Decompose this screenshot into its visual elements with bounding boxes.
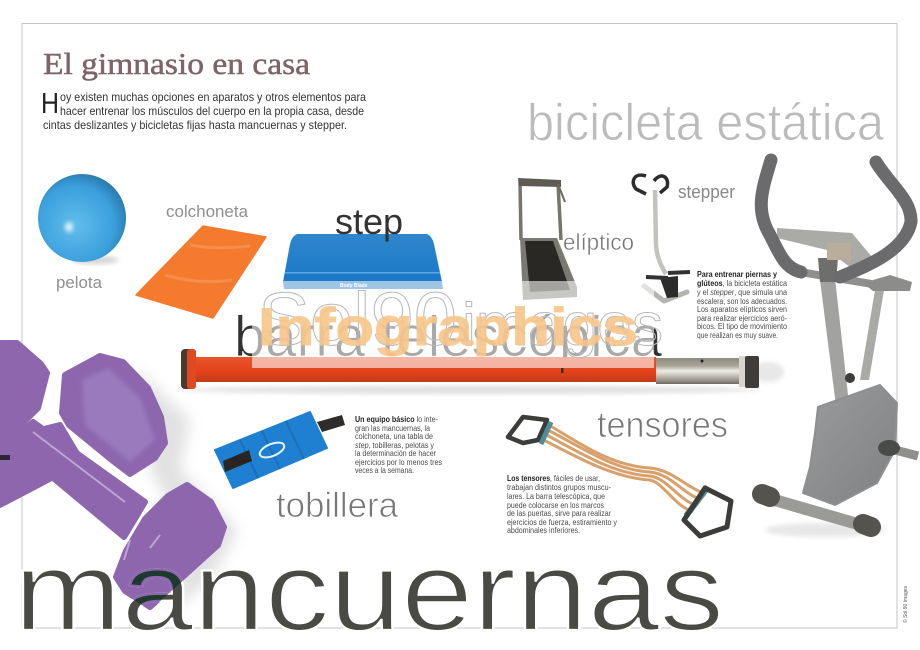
watermark: images: images — [462, 291, 663, 358]
dumbbell shadow — [135, 368, 238, 612]
bike console — [777, 228, 872, 267]
brand on step: Body Blade — [340, 283, 368, 289]
text block: piernas y glúteos: glúteos, la bicicleta estática — [697, 279, 787, 288]
intro lines — [43, 90, 366, 132]
icon: stepper — [633, 175, 690, 301]
icon: resistance bands — [508, 417, 731, 536]
label: tobillera: tobillera — [276, 486, 399, 525]
bike foot tube — [764, 497, 868, 527]
text block: piernas y glúteos: y el stepper, que simula una — [697, 288, 787, 297]
icon: ball — [38, 174, 126, 264]
text block: equipo básico: veces a la semana. — [355, 466, 414, 475]
bike rear axle — [880, 446, 918, 456]
text block: tensores: lares. La barra telescópica, que — [507, 492, 605, 501]
text block: piernas y glúteos: para realizar ejercicios aeró- — [697, 314, 787, 323]
text block: piernas y glúteos: Los aparatos elípticos sirven — [697, 305, 787, 314]
drop cap: H — [41, 88, 59, 120]
text block: tensores — [507, 474, 617, 535]
rear dumbbell highlight — [82, 368, 155, 462]
text block: tensores: de las puertas, sirve para realizar — [507, 509, 611, 518]
bike neck — [818, 258, 838, 282]
intro lines: hacer entrenar los músculos del cuerpo en la propia casa, desde — [60, 104, 364, 118]
text block: tensores: Los tensores, fáciles de usar, — [507, 474, 600, 483]
icon: dumbbells — [0, 343, 238, 612]
label: step: step — [335, 201, 403, 242]
label: elíptico: elíptico — [563, 229, 634, 255]
icon: telescopic bar — [180, 349, 784, 394]
bike housing — [803, 385, 897, 505]
icon: step platform — [283, 234, 443, 289]
label: pelota: pelota — [56, 273, 103, 292]
bike crossbar — [800, 268, 872, 288]
bike knob — [845, 373, 855, 383]
text block: piernas y glúteos: escalera, son los adecuados. — [697, 297, 787, 306]
heading: bicicleta estática: bicicleta estática — [527, 93, 885, 151]
dark descender of barra telescópica — [561, 368, 564, 373]
text block: equipo básico: step, tobilleras, pelotas y — [355, 441, 434, 450]
bike foot caps — [762, 494, 871, 527]
text block: equipo básico: colchoneta, una tabla de — [355, 432, 433, 441]
text block: equipo básico: gran las mancuernas, la — [355, 424, 430, 433]
intro text — [41, 88, 366, 132]
front dumbbell — [0, 343, 224, 607]
icon: exercise bike — [761, 160, 918, 537]
bike seat post — [860, 290, 884, 380]
bike handlebars — [761, 160, 911, 277]
text block: tensores: abdominales inferiores. — [507, 526, 580, 535]
title: El gimnasio en casa — [43, 46, 310, 81]
icon: treadmill — [518, 178, 577, 300]
text block: equipo básico: la determinación de hacer — [355, 449, 436, 458]
text block: piernas y glúteos: que realizan es muy suave. — [697, 331, 778, 340]
text block: equipo básico — [355, 415, 442, 475]
text block: piernas y glúteos: bicos. El tipo de movimiento — [697, 322, 787, 331]
bike main post — [820, 278, 849, 406]
label: colchoneta: colchoneta — [166, 202, 249, 221]
icon: mat — [136, 226, 266, 318]
watermark — [252, 277, 663, 368]
text block: piernas y glúteos: Para entrenar piernas y — [697, 270, 777, 279]
text block: tensores: trabajan distintos grupos muscu- — [507, 483, 611, 492]
text block: piernas y glúteos — [697, 270, 787, 340]
bike console chrome — [827, 243, 851, 260]
label: barra telescópica: barra telescópica — [234, 305, 662, 369]
text block: tensores: ejercicios de fuerza, estiramiento y — [507, 518, 617, 527]
photo credit: © Sol 90 Images — [902, 585, 909, 623]
label: stepper: stepper — [678, 182, 735, 202]
bike crank — [878, 440, 900, 456]
translucent watermark panel — [252, 281, 654, 368]
watermark: Sol90: Sol90 — [258, 277, 457, 361]
bike seat — [863, 275, 912, 291]
icon: ankle weight — [215, 412, 345, 488]
watermark: Infographics: Infographics — [258, 298, 638, 357]
label: tensores: tensores — [597, 405, 728, 445]
text block: equipo básico: ejercicios por lo menos tres — [355, 458, 442, 467]
text block: equipo básico: Un equipo básico lo inte- — [355, 415, 438, 424]
rear dumbbell — [0, 356, 165, 505]
text block: tensores: puede colocarse en los marcos — [507, 501, 604, 510]
intro lines: cintas deslizantes y bicicletas fijas hasta mancuernas y stepper. — [43, 118, 347, 132]
intro lines: oy existen muchas opciones en aparatos y otros elementos para — [60, 90, 366, 104]
